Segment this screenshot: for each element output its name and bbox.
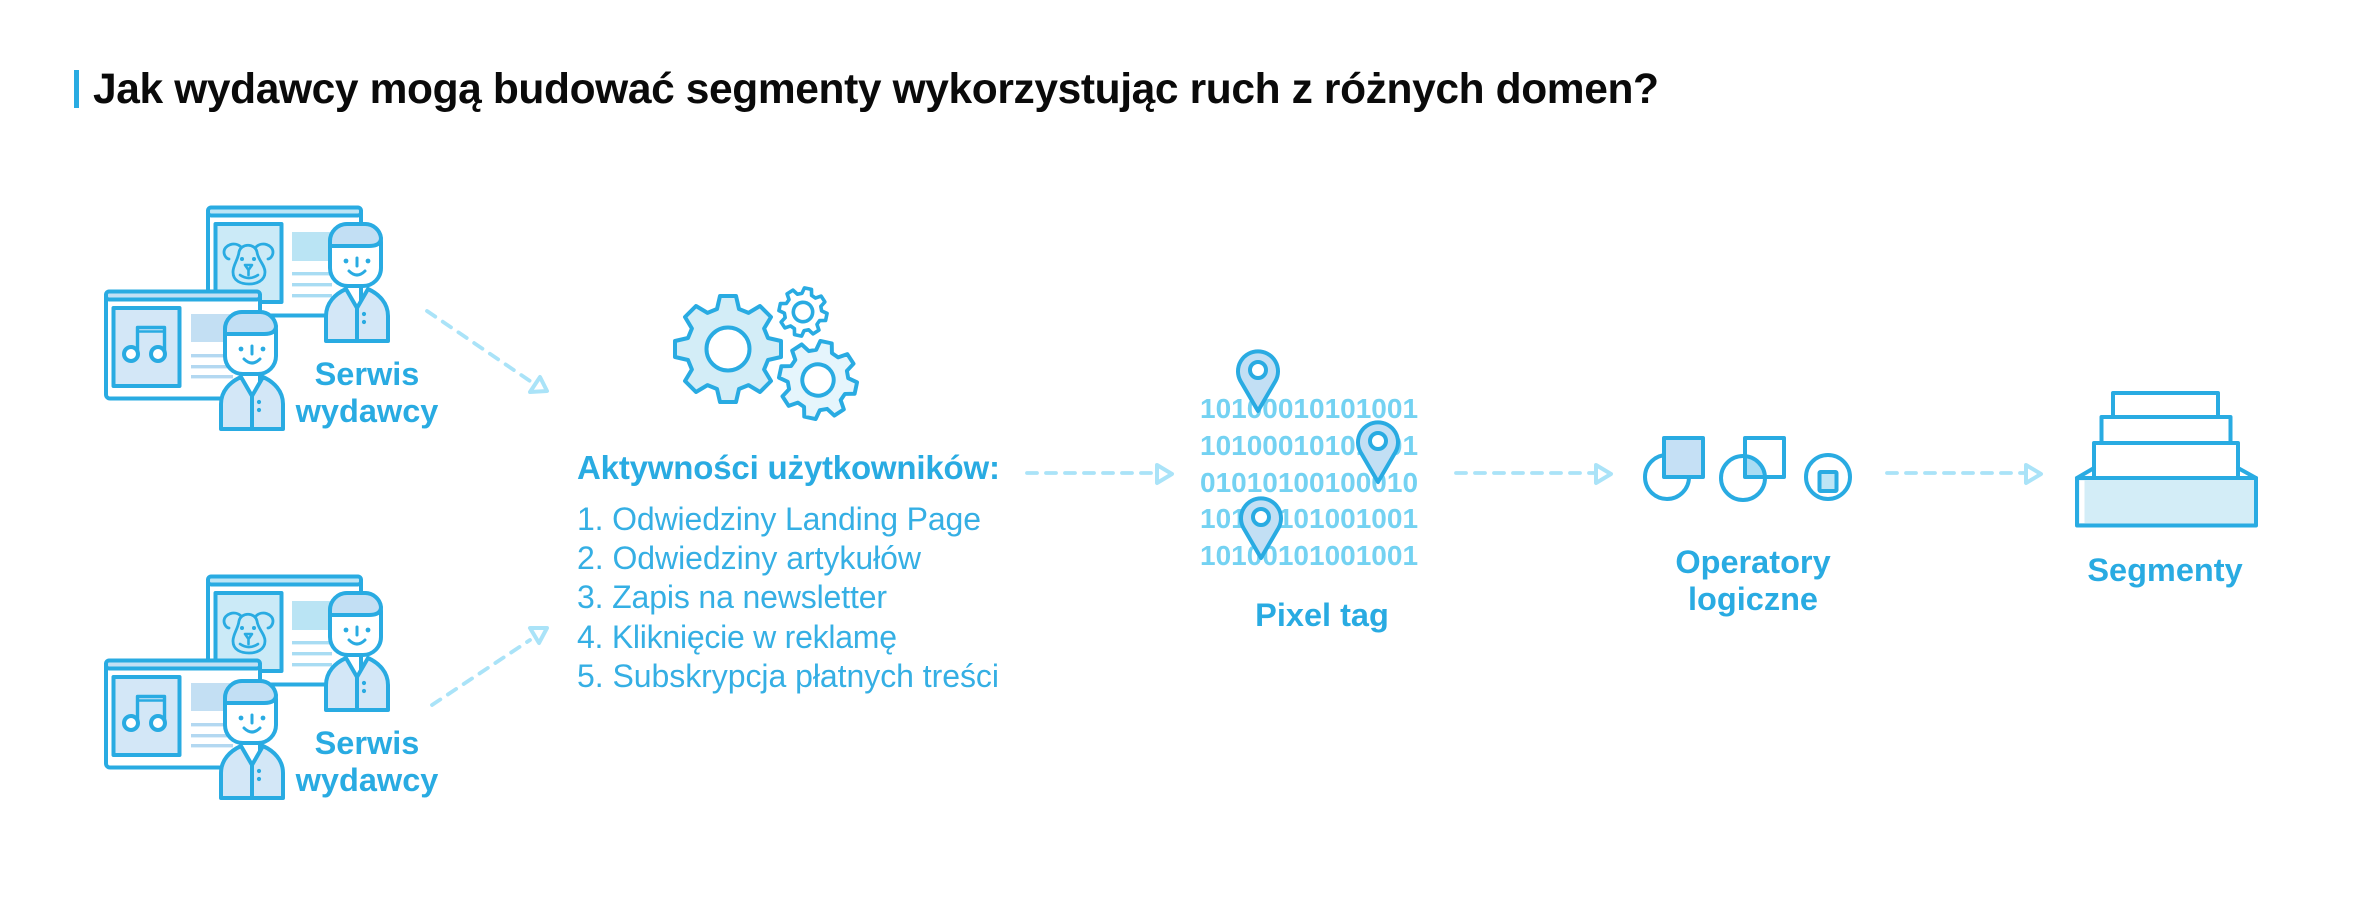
panel: publisher services top — [106, 208, 438, 429]
icon: user front — [221, 681, 283, 798]
icon: user back — [326, 593, 388, 710]
icon: operator 2 — [1721, 438, 1784, 500]
panel: segments — [2077, 393, 2256, 588]
binary code: 10100101001001 — [1200, 503, 1418, 534]
arrow: activities to pixel tag — [1027, 465, 1172, 483]
arrow: operators to segments — [1887, 465, 2041, 483]
list: 4. Kliknięcie w reklamę — [577, 619, 897, 655]
icon: pin 1 — [1238, 351, 1278, 411]
list: 2. Odwiedziny artykułów — [577, 540, 922, 576]
binary code: 10100010101001 — [1200, 430, 1418, 461]
label: Operatory logiczne: Operatory — [1675, 544, 1831, 580]
list: 5. Subskrypcja płatnych treści — [577, 658, 999, 694]
icon: pin 2 — [1358, 422, 1398, 482]
icon: stacked box — [2077, 393, 2256, 526]
icon: user back — [326, 224, 388, 341]
icon: dog website — [208, 576, 361, 684]
text block: user activities — [577, 449, 1000, 694]
arrow: top service to activities — [427, 311, 547, 392]
label: Serwis wydawcy: wydawcy — [295, 762, 438, 798]
label: Serwis wydawcy: wydawcy — [295, 393, 438, 429]
label: Serwis wydawcy — [295, 725, 438, 798]
label: Serwis wydawcy: Serwis — [315, 356, 419, 392]
icon: music website — [106, 660, 260, 768]
big gear — [675, 296, 781, 402]
icon: user front — [221, 312, 283, 429]
icon: pin 3 — [1241, 498, 1281, 558]
panel: publisher services bottom — [106, 576, 438, 798]
binary code — [1200, 393, 1418, 571]
icon: dog website — [208, 208, 361, 316]
panel: pixel tag — [1200, 351, 1418, 633]
icon: operator 1 — [1645, 438, 1703, 499]
label: Pixel tag: Pixel tag — [1255, 597, 1389, 633]
arrow: bottom service to activities — [432, 628, 547, 705]
title: Jak wydawcy mogą budować segmenty wykorzystując ruch z różnych domen? — [93, 66, 1659, 113]
icon: operator 3 — [1806, 455, 1850, 499]
binary code: 10100010101001 — [1200, 393, 1418, 424]
label: Serwis wydawcy — [295, 356, 438, 429]
icon: music website — [106, 292, 260, 398]
list: 3. Zapis na newsletter — [577, 579, 887, 615]
list — [577, 501, 999, 694]
binary code: 10100101001001 — [1200, 540, 1418, 571]
icon: gears — [675, 284, 864, 426]
label: Serwis wydawcy: Serwis — [315, 725, 419, 761]
binary code: 01010100100010 — [1200, 467, 1418, 498]
label: Operatory logiczne: logiczne — [1688, 581, 1818, 617]
label: Segmenty: Segmenty — [2087, 552, 2243, 588]
arrow: pixel tag to operators — [1456, 465, 1611, 483]
heading: Aktywności użytkowników: — [577, 449, 1000, 486]
medium gear — [772, 334, 864, 426]
panel: logical operators — [1645, 438, 1850, 617]
small gear — [775, 284, 831, 340]
list: 1. Odwiedziny Landing Page — [577, 501, 981, 537]
label: Operatory logiczne — [1675, 544, 1831, 617]
